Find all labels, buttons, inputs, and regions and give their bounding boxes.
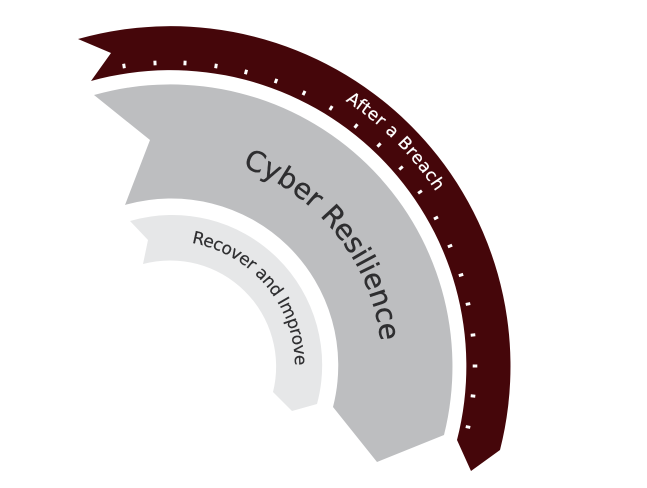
- label: Recover and Improve: Recover and Improve: [193, 230, 304, 365]
- band shape: After a Breach: [78, 26, 510, 471]
- band shape: Recover and Improve: [130, 215, 322, 411]
- panel: After a Breach band: [78, 26, 510, 471]
- label: After a Breach: After a Breach: [345, 93, 442, 190]
- band shape: Cyber Resilience: [94, 84, 452, 462]
- tick marks: [122, 61, 477, 429]
- panel: Recover and Improve band: [130, 215, 322, 411]
- label: Cyber Resilience: Cyber Resilience: [246, 150, 396, 340]
